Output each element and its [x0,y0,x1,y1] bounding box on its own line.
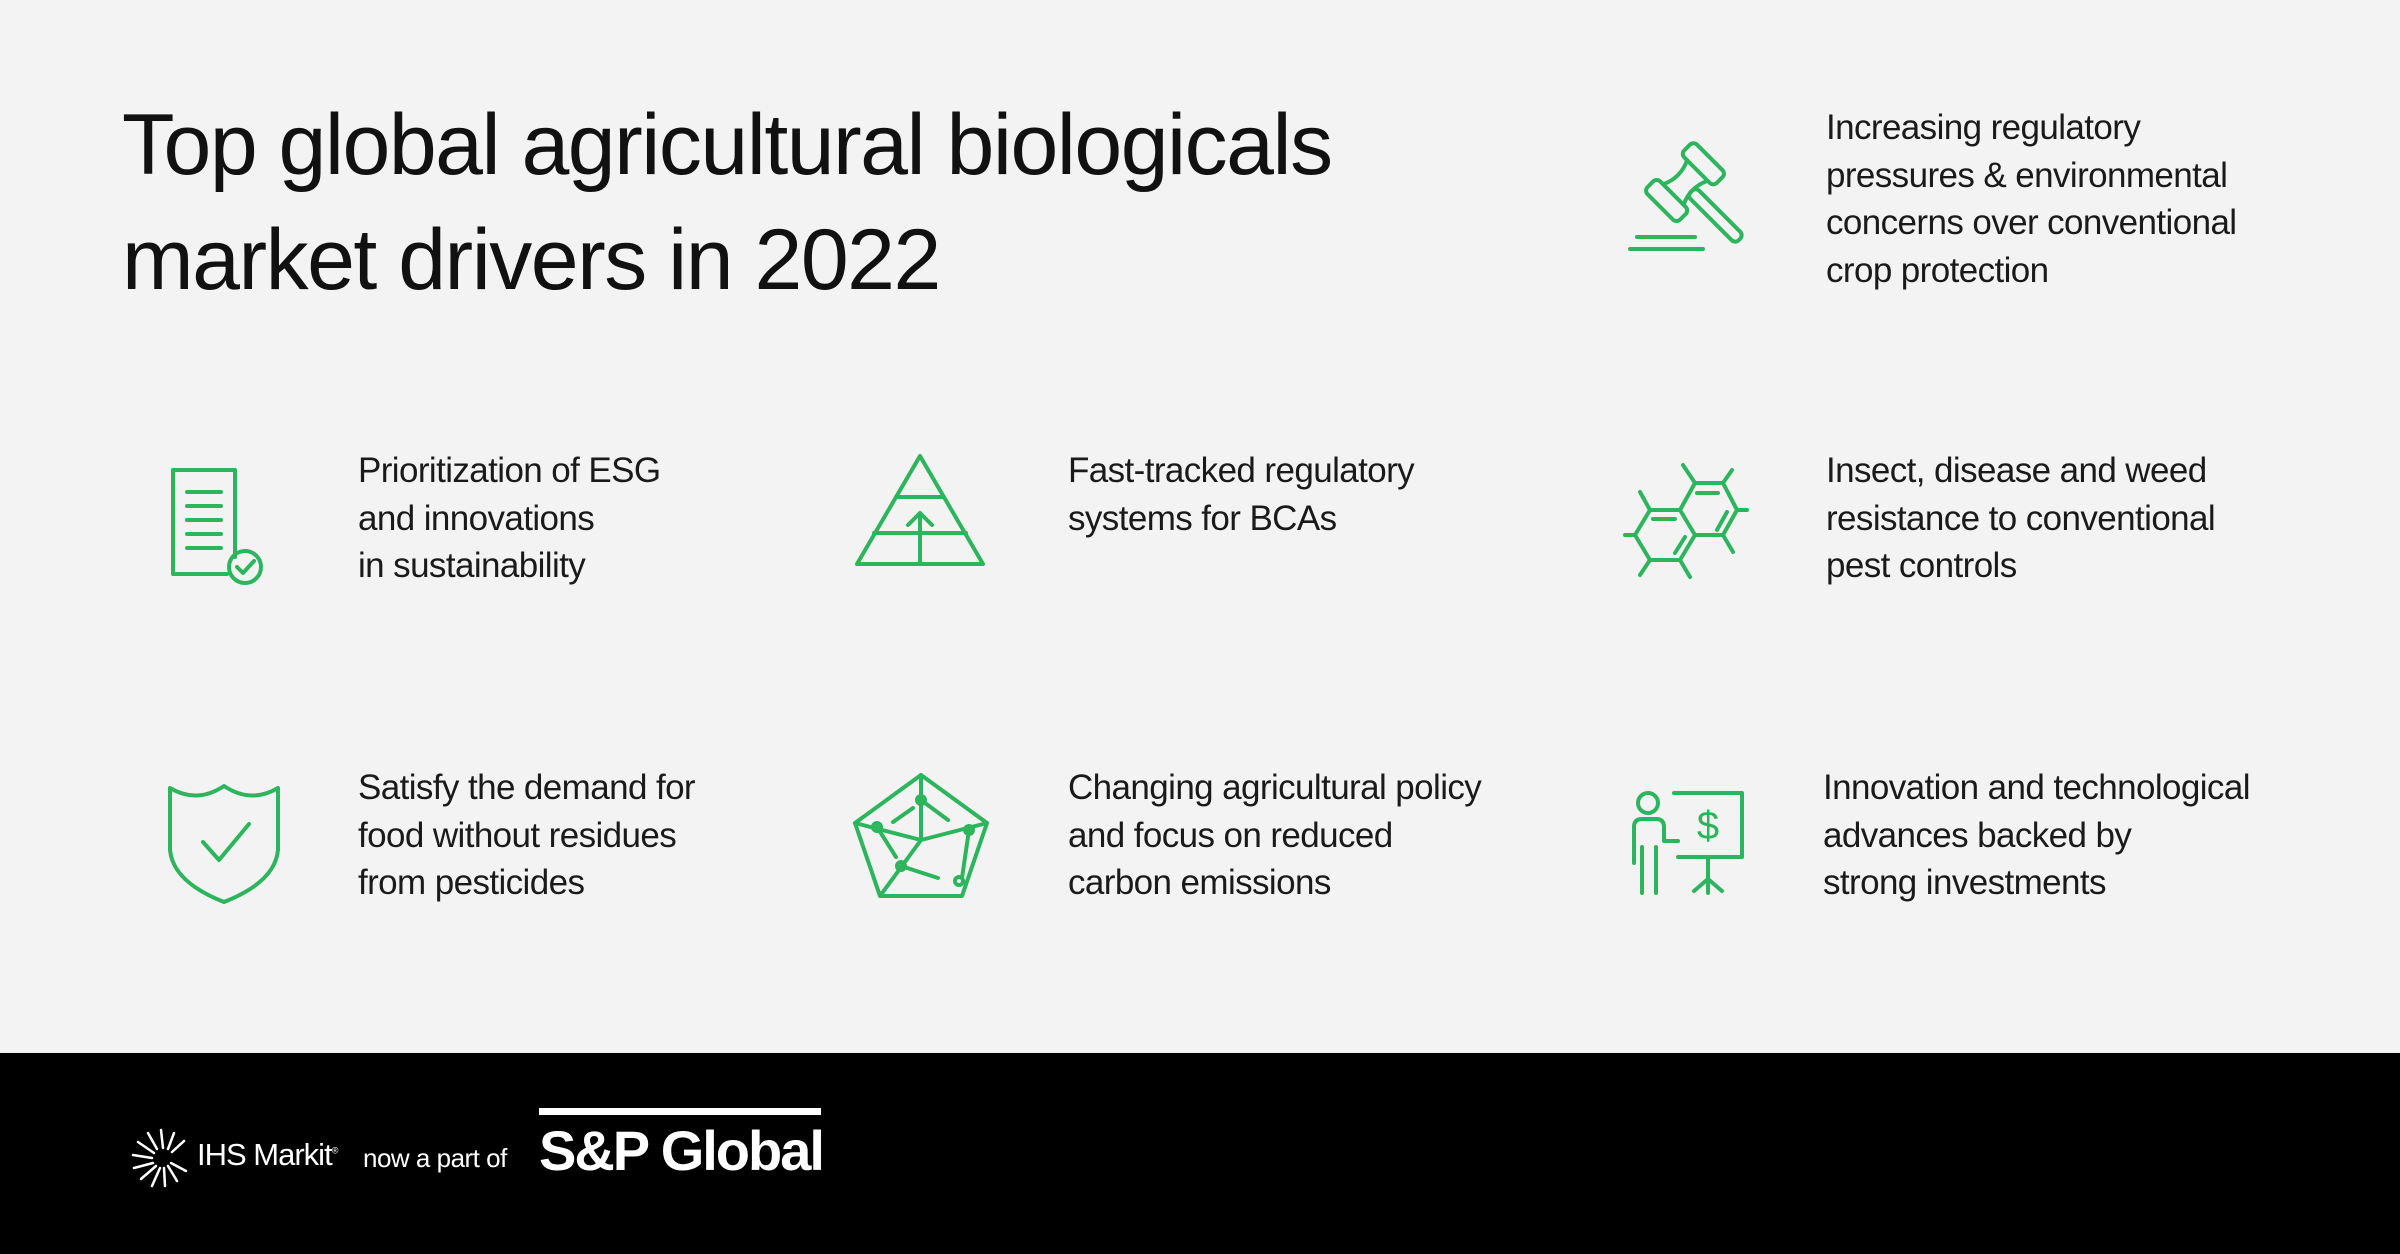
text: fast-tracked [1068,451,1414,538]
icon: document with check [171,468,263,585]
text: innovation: Innovation and technological [1823,768,2250,807]
icon: gavel [1628,141,1744,251]
text: regulatory pressures: pressures & environmental [1826,156,2227,194]
text: food residues [358,768,695,902]
text: innovation: strong investments [1823,863,2106,902]
icon: hexagons [1623,462,1749,580]
text: fast-tracked: Fast-tracked regulatory [1068,451,1414,490]
text: ESG: and innovations [358,498,594,538]
title [122,97,1332,308]
text: ESG: Prioritization of ESG [358,451,661,490]
text: innovation: advances backed by [1823,816,2131,854]
icon: pyramid [855,454,986,566]
text: ESG: in sustainability [358,546,585,585]
text: agricultural policy: carbon emissions [1068,863,1331,902]
text: food residues: food without residues [358,816,676,854]
text: now a part of: now a part of [363,1143,507,1173]
text: agricultural policy: and focus on reduced [1068,816,1393,854]
text: fast-tracked: systems for BCAs [1068,498,1337,538]
icon: IHS sunburst [132,1128,188,1188]
icon: presenter with dollar board: $ [1697,804,1719,848]
logo: S&P Global: S&P Global [539,1119,823,1182]
text: food residues: Satisfy the demand for [358,768,695,807]
text: innovation [1823,768,2250,902]
text: resistance: pest controls [1826,546,2017,585]
text: agricultural policy [1068,768,1482,902]
text: ESG [358,451,661,585]
logo text: IHS Markit: IHS Markit® [197,1137,337,1172]
footer [0,1053,2400,1254]
icon: presenter with dollar board [1632,791,1744,895]
title: market drivers in 2022 [122,212,940,308]
text: regulatory pressures [1826,108,2236,290]
text: regulatory pressures: crop protection [1826,250,2049,290]
text: food residues: from pesticides [358,863,584,902]
text: resistance: resistance to conventional [1826,498,2215,538]
icon: shield [168,784,280,904]
icon: pentagon network [852,773,989,898]
title: Top global agricultural biologicals [122,97,1332,193]
text: resistance: Insect, disease and weed [1826,451,2207,490]
text: resistance [1826,451,2215,585]
text: agricultural policy: Changing agricultural policy [1068,768,1481,807]
text: regulatory pressures: concerns over conventional [1826,203,2236,242]
text: regulatory pressures: Increasing regulatory [1826,108,2140,147]
